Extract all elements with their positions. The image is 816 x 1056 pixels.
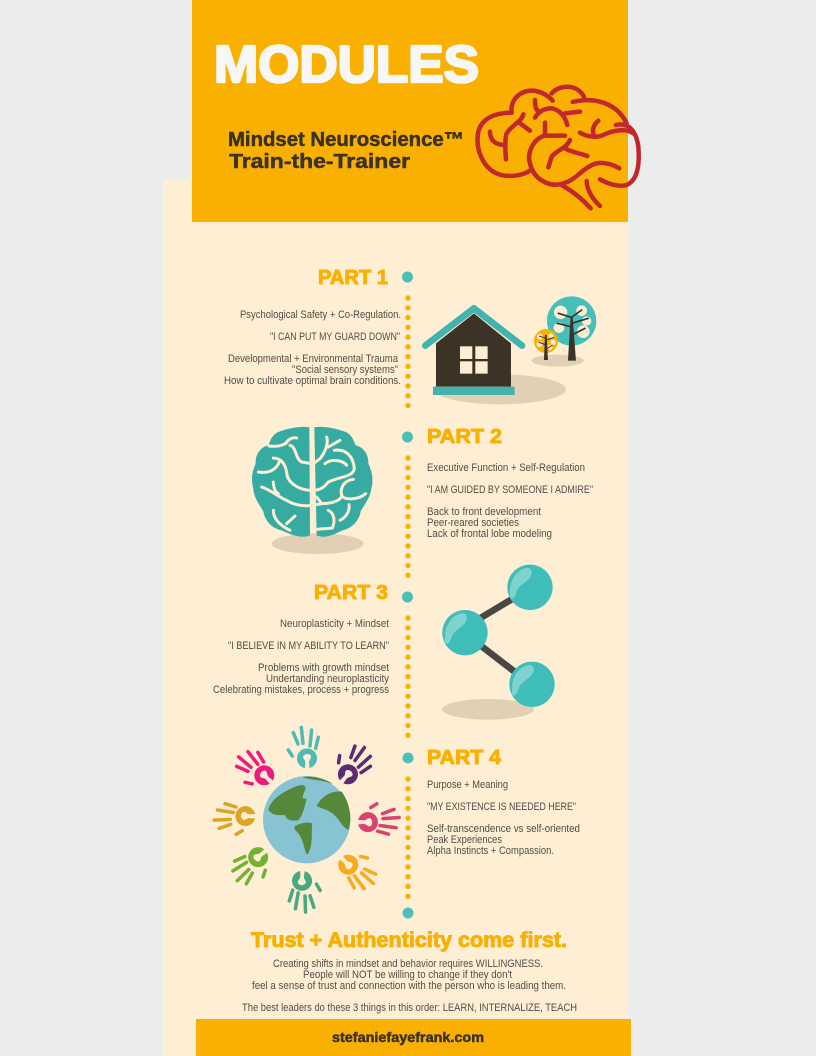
icon: house and trees [425, 296, 596, 404]
section: part 1 text [224, 267, 401, 387]
panel: header banner [192, 0, 628, 222]
text block: part 4: "MY EXISTENCE IS NEEDED HERE" [427, 801, 576, 813]
small tree [534, 329, 558, 360]
text block: closing: The best leaders do these 3 things in this order: LEARN, INTERNALIZE, TEACH [242, 1002, 577, 1014]
text block: part 3 [213, 618, 389, 696]
globe [263, 776, 350, 863]
subtitle [228, 129, 464, 173]
bonds [478, 597, 517, 673]
heading: part 2: PART 2 [427, 426, 502, 448]
section: part 2 text [427, 426, 593, 540]
text block: part 1: "Social sensory systems" [292, 364, 398, 376]
brain shadow [272, 533, 364, 554]
hand: teal [288, 727, 318, 769]
text block: part 2: "I AM GUIDED BY SOMEONE I ADMIRE" [427, 484, 593, 496]
footer band [196, 1019, 631, 1056]
heading: trust and authenticity: Trust + Authenticity come first. [251, 929, 567, 952]
hemispheres [252, 427, 372, 537]
hand: yellow [213, 803, 256, 835]
icon: teal brain [252, 427, 372, 554]
text block: part 1: Psychological Safety + Co-Regulation. [240, 309, 401, 321]
molecule shadow [442, 699, 534, 720]
heading: part 4: PART 4 [427, 747, 502, 769]
text block: part 2: Back to front development [427, 506, 541, 518]
icon: globe with hands [213, 727, 400, 913]
text block: part 3: Celebrating mistakes, process + progress [213, 684, 389, 696]
timeline: dotted line [405, 298, 411, 897]
text block: part 3: Undertanding neuroplasticity [266, 673, 389, 685]
hand: green [289, 870, 321, 913]
timeline: teal nodes [402, 272, 414, 918]
house shadow [434, 374, 566, 404]
text block: part 1 [224, 309, 401, 387]
big tree [547, 296, 596, 361]
icon: red brain outline [478, 87, 639, 208]
text block: part 2: Peer-reared societies [427, 517, 519, 529]
heading: part 3: PART 3 [314, 582, 388, 604]
text block: part 1: Developmental + Environmental Trauma [228, 353, 399, 365]
text block: closing: People will NOT be willing to change if they don't [303, 969, 512, 981]
text block: part 4: Alpha Instincts + Compassion. [427, 845, 554, 857]
hand: crimson [357, 803, 400, 835]
section: closing message [242, 929, 577, 1014]
house body [436, 313, 511, 387]
atoms [442, 565, 555, 707]
icon: molecule [442, 565, 555, 720]
text block: part 3: Problems with growth mindset [258, 662, 389, 674]
text block: part 3: Neuroplasticity + Mindset [280, 618, 389, 630]
text block: part 3: "I BELIEVE IN MY ABILITY TO LEARN" [228, 640, 389, 652]
text block: part 4: Self-transcendence vs self-oriented [427, 823, 580, 835]
atom highlights [445, 568, 534, 696]
text block: part 4: Peak Experiences [427, 834, 502, 846]
hand: orange [333, 844, 383, 895]
title: MODULES [214, 36, 479, 94]
tree shadow [532, 355, 584, 367]
window [460, 346, 488, 374]
text block: closing: Creating shifts in mindset and behavior requires WILLINGNESS. [273, 958, 543, 970]
subtitle: Mindset Neuroscience™ [228, 129, 464, 151]
brain folds [258, 437, 366, 530]
text block: part 1: "I CAN PUT MY GUARD DOWN" [270, 331, 400, 343]
text block: part 2: Executive Function + Self-Regulation [427, 462, 585, 474]
text block: part 1: How to cultivate optimal brain conditions. [224, 375, 401, 387]
text block: closing [242, 958, 577, 1014]
doorstep [433, 387, 515, 395]
heading: part 1: PART 1 [318, 267, 388, 289]
text block: part 2: Lack of frontal lobe modeling [427, 528, 552, 540]
roof [425, 308, 522, 346]
panel: cream content panel [163, 180, 628, 1056]
text block: closing: feel a sense of trust and connection with the person who is leading them. [252, 980, 566, 992]
hand: lime [227, 842, 278, 891]
hand: purple [327, 739, 377, 790]
text block: part 4 [427, 779, 580, 857]
text block: part 2 [427, 462, 593, 540]
subtitle: Train-the-Trainer [229, 151, 410, 173]
section: part 4 text [427, 747, 580, 857]
section: part 3 text [213, 582, 389, 696]
footer url: stefaniefayefrank.com [332, 1029, 484, 1045]
hand: pink [229, 745, 280, 796]
text block: part 4: Purpose + Meaning [427, 779, 508, 791]
